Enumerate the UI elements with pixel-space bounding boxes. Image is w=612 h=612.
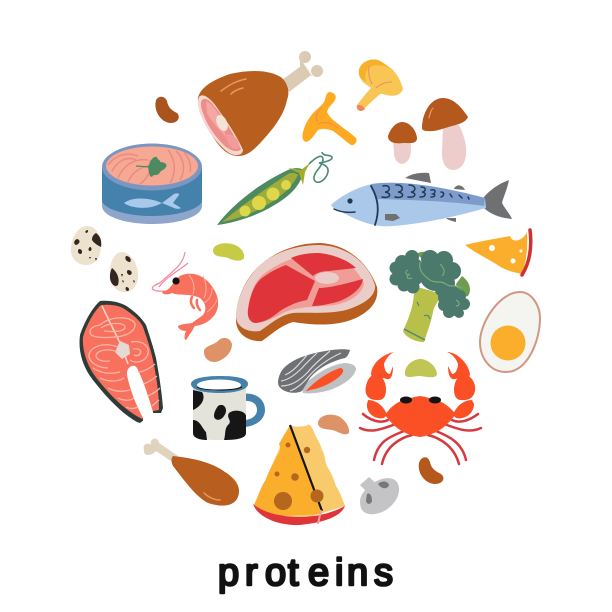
canned salmon <box>102 144 202 224</box>
boiled egg <box>480 292 540 372</box>
cow mug <box>191 376 265 440</box>
mussel <box>278 349 356 393</box>
pink bean left <box>204 338 232 362</box>
quail eggs <box>71 226 138 292</box>
pink bean lower <box>318 415 349 434</box>
brown bean lower <box>419 457 443 484</box>
cashew bean <box>155 97 179 123</box>
blue fish <box>331 173 512 226</box>
title: proteins <box>218 552 393 594</box>
chicken drumstick <box>144 439 239 506</box>
salmon steak <box>79 301 163 426</box>
ham <box>198 51 323 156</box>
porcini mushrooms <box>388 98 468 170</box>
cheese wedge <box>253 425 345 525</box>
pea pod <box>217 152 332 225</box>
shrimp <box>152 252 218 340</box>
green bean middle <box>405 359 437 377</box>
chanterelle upper <box>357 59 403 111</box>
grey mushroom <box>360 477 399 514</box>
crab <box>360 352 481 464</box>
green bean upper <box>213 243 244 261</box>
broccoli <box>390 250 470 342</box>
central steak <box>236 243 377 341</box>
chanterelle lower <box>302 92 357 145</box>
cheese slice <box>465 230 531 275</box>
